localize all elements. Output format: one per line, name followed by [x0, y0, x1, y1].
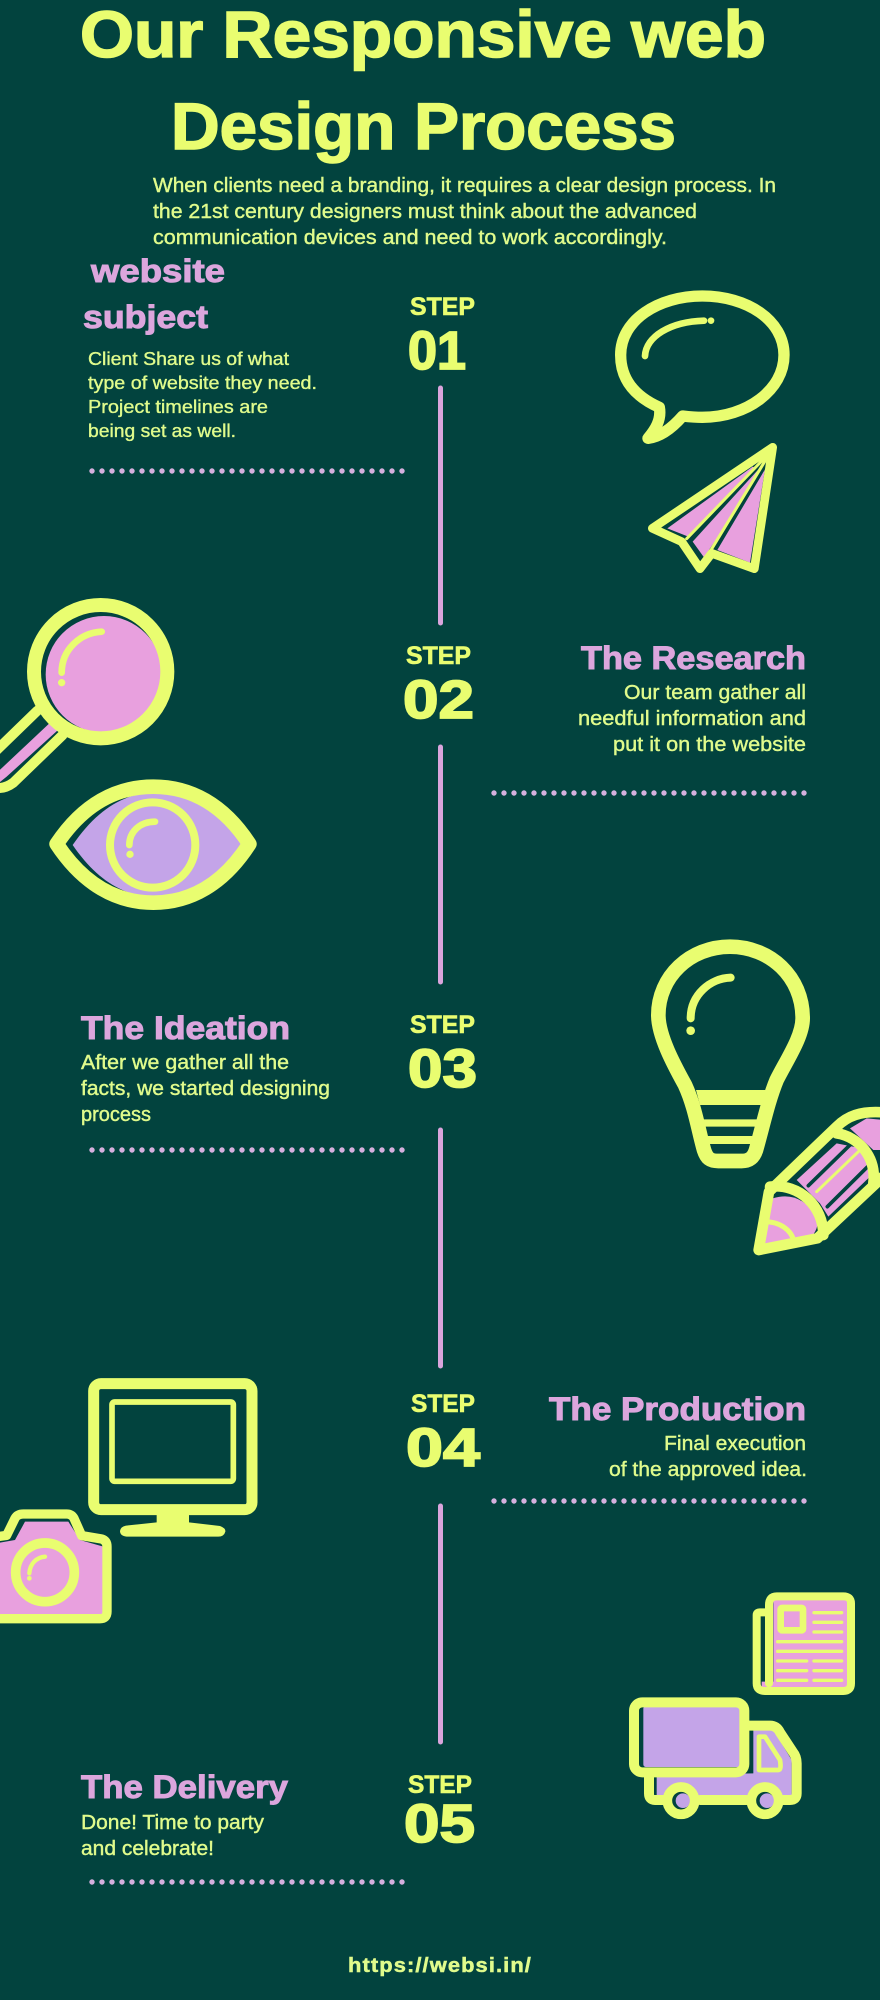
body: step 3: process	[81, 1104, 151, 1126]
heading: the ideation: The Ideation	[81, 1010, 290, 1046]
step 04 label: STEP	[411, 1390, 475, 1418]
body: step 1: type of website they need.	[88, 373, 317, 393]
icon: light bulb	[658, 947, 803, 1161]
body: step 5: and celebrate!	[81, 1838, 214, 1860]
title: Design Process	[171, 89, 676, 163]
icon: delivery truck	[634, 1702, 797, 1814]
body: step 4	[609, 1433, 807, 1481]
body: step 1: Client Share us of what	[88, 349, 289, 369]
icon: newspaper	[757, 1596, 851, 1691]
body: step 1: being set as well.	[88, 421, 236, 441]
body: step 1: Project timelines are	[88, 397, 268, 417]
timeline segment 3	[438, 1130, 443, 1366]
step 01 label	[408, 293, 475, 381]
icon: paper plane	[652, 447, 773, 569]
panel: step 4 text	[549, 1391, 807, 1481]
heading: the delivery: The Delivery	[81, 1769, 288, 1805]
timeline segment 2	[438, 747, 443, 982]
heading: website subject: subject	[83, 299, 208, 335]
title	[80, 0, 766, 163]
step 02 label: 02	[403, 670, 474, 730]
body: step 2: Our team gather all	[624, 682, 806, 704]
body: step 3	[81, 1052, 330, 1126]
timeline segment 1	[438, 388, 443, 623]
footer url: https://websi.in/	[348, 1955, 532, 1977]
body: step 2	[578, 682, 806, 756]
step 05 label: STEP	[408, 1771, 472, 1799]
icon: monitor	[94, 1384, 252, 1537]
step 02 label: STEP	[406, 642, 471, 670]
body: step 1	[88, 349, 317, 441]
heading: website subject	[83, 253, 225, 335]
step 01 label: 01	[408, 321, 466, 381]
body: step 5: Done! Time to party	[81, 1812, 264, 1834]
timeline segment 4	[438, 1506, 443, 1742]
panel: step 5 text	[81, 1769, 288, 1860]
intro text	[153, 175, 776, 249]
panel: step 2 text	[578, 640, 806, 756]
step 04 label	[406, 1390, 480, 1478]
body: step 2: needful information and	[578, 708, 806, 730]
intro text: When clients need a branding, it requires a clear design process. In	[153, 175, 776, 197]
step 01 label: STEP	[410, 293, 475, 321]
body: step 2: put it on the website	[613, 734, 806, 756]
body: step 3: facts, we started designing	[81, 1078, 330, 1100]
body: step 3: After we gather all the	[81, 1052, 289, 1074]
icon: eye	[57, 787, 249, 903]
step 02 label	[403, 642, 474, 730]
step 03 label: STEP	[410, 1011, 475, 1039]
body: step 4: Final execution	[664, 1433, 806, 1455]
body: step 4: of the approved idea.	[609, 1459, 807, 1481]
icon: magnifying glass	[0, 605, 167, 788]
step 03 label: 03	[408, 1039, 477, 1099]
step 03 label	[408, 1011, 477, 1099]
icon: pencil	[759, 1112, 880, 1250]
body: step 5	[81, 1812, 264, 1860]
heading: the research: The Research	[581, 640, 806, 676]
step 05 label: 05	[404, 1794, 475, 1854]
panel: step 1 text	[83, 253, 317, 441]
intro text: the 21st century designers must think about the advanced	[153, 201, 697, 223]
heading: the production: The Production	[549, 1391, 806, 1427]
icon: speech bubble	[621, 296, 784, 438]
step 04 label: 04	[406, 1418, 480, 1478]
heading: website subject: website	[90, 253, 225, 289]
step 05 label	[404, 1771, 475, 1854]
intro text: communication devices and need to work accordingly.	[153, 227, 667, 249]
panel: step 3 text	[81, 1010, 330, 1126]
icon: camera	[0, 1514, 107, 1619]
